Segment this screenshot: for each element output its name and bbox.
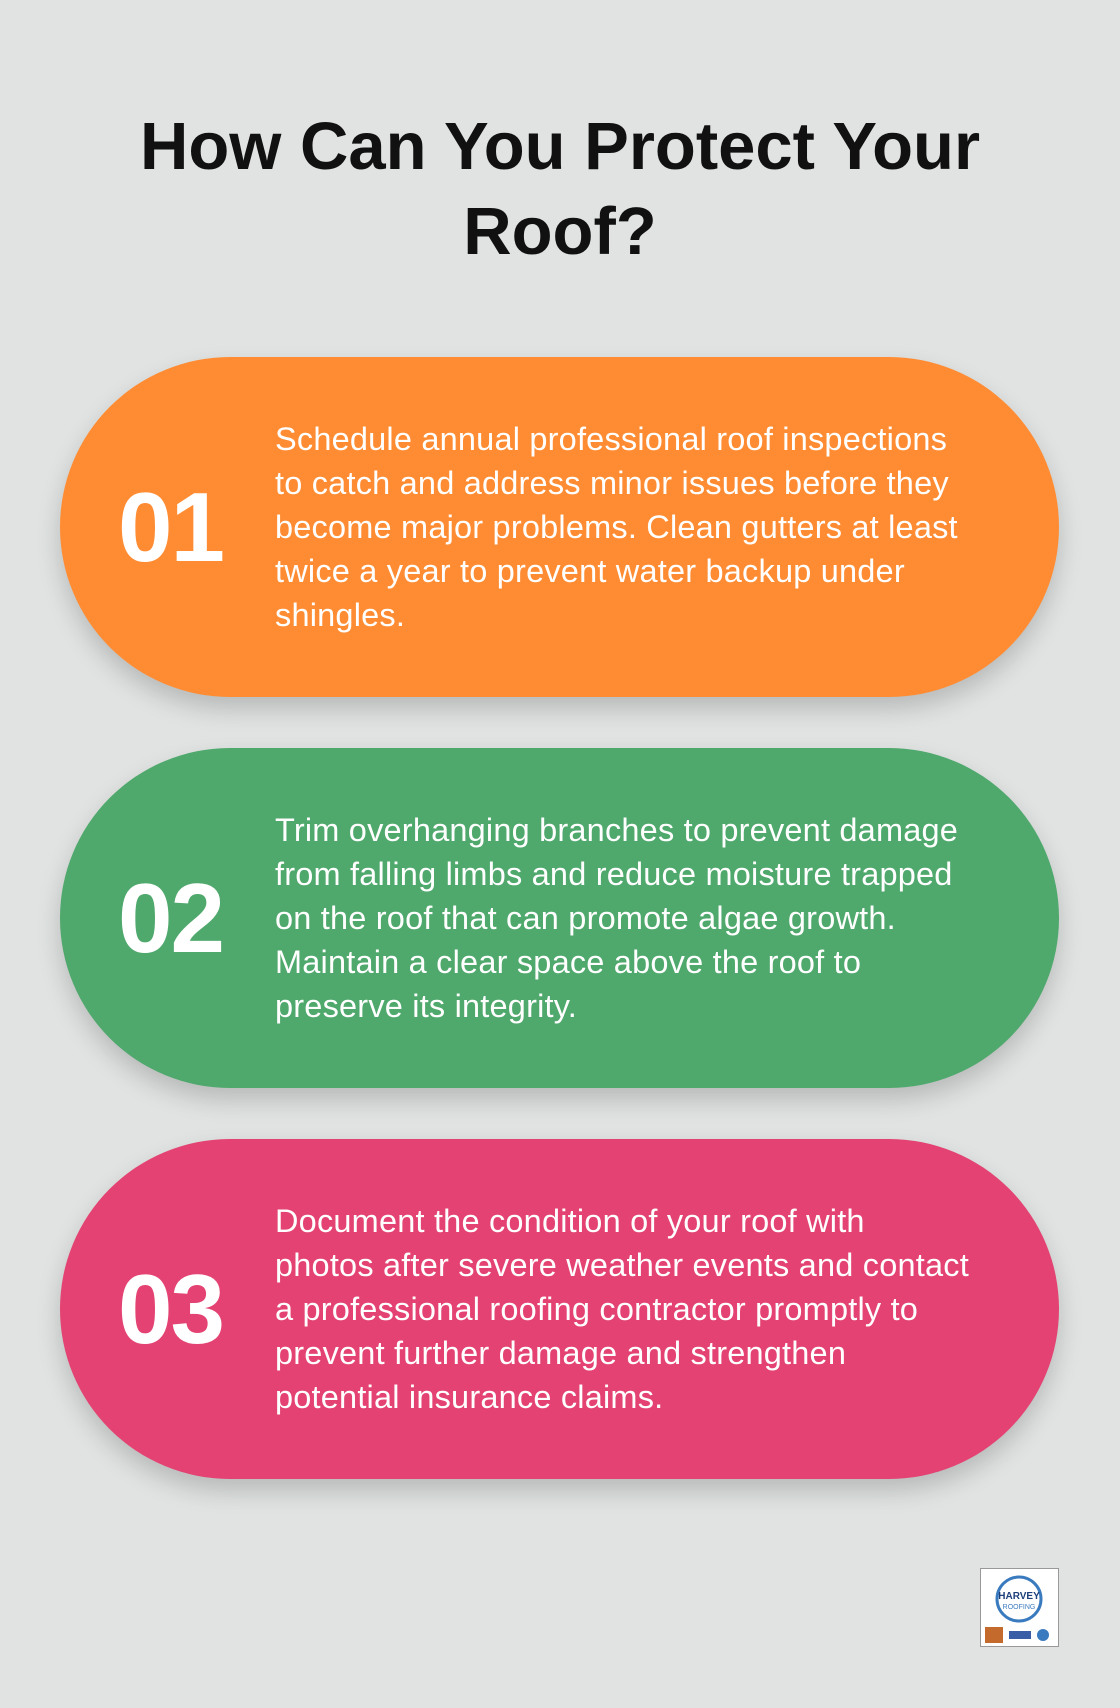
- text 03: a professional roofing contractor promptly to: [275, 1291, 918, 1327]
- title: How Can You Protect Your: [140, 109, 980, 184]
- number 01: 01: [118, 472, 223, 582]
- text 03: prevent further damage and strengthen: [275, 1335, 846, 1371]
- title: Roof?: [463, 194, 657, 269]
- panel: step 03: [60, 1139, 1059, 1479]
- text 02: Trim overhanging branches to prevent damage from falling limbs and reduce moisture trapped on the roof that can promote algae growth. Maintain a clear space above the roof to preserve its integrity.: [275, 812, 958, 1024]
- logo: [980, 1568, 1059, 1647]
- text 03: [275, 1203, 969, 1415]
- text 03: potential insurance claims.: [275, 1379, 663, 1415]
- number 02: 02: [118, 863, 223, 973]
- panel: step 01: [60, 357, 1059, 697]
- text 01: Schedule annual professional roof inspections to catch and address minor issues before they become major problems. Clean gutters at least twice a year to prevent water backup under shingles.: [275, 421, 958, 633]
- title: [140, 109, 980, 269]
- panel: step 02: [60, 748, 1059, 1088]
- text 03: photos after severe weather events and contact: [275, 1247, 969, 1283]
- text 03: Document the condition of your roof with: [275, 1203, 865, 1239]
- number 03: 03: [118, 1254, 223, 1364]
- logo: ROOFING: [1003, 1604, 1035, 1611]
- logo: HARVEY: [998, 1591, 1040, 1602]
